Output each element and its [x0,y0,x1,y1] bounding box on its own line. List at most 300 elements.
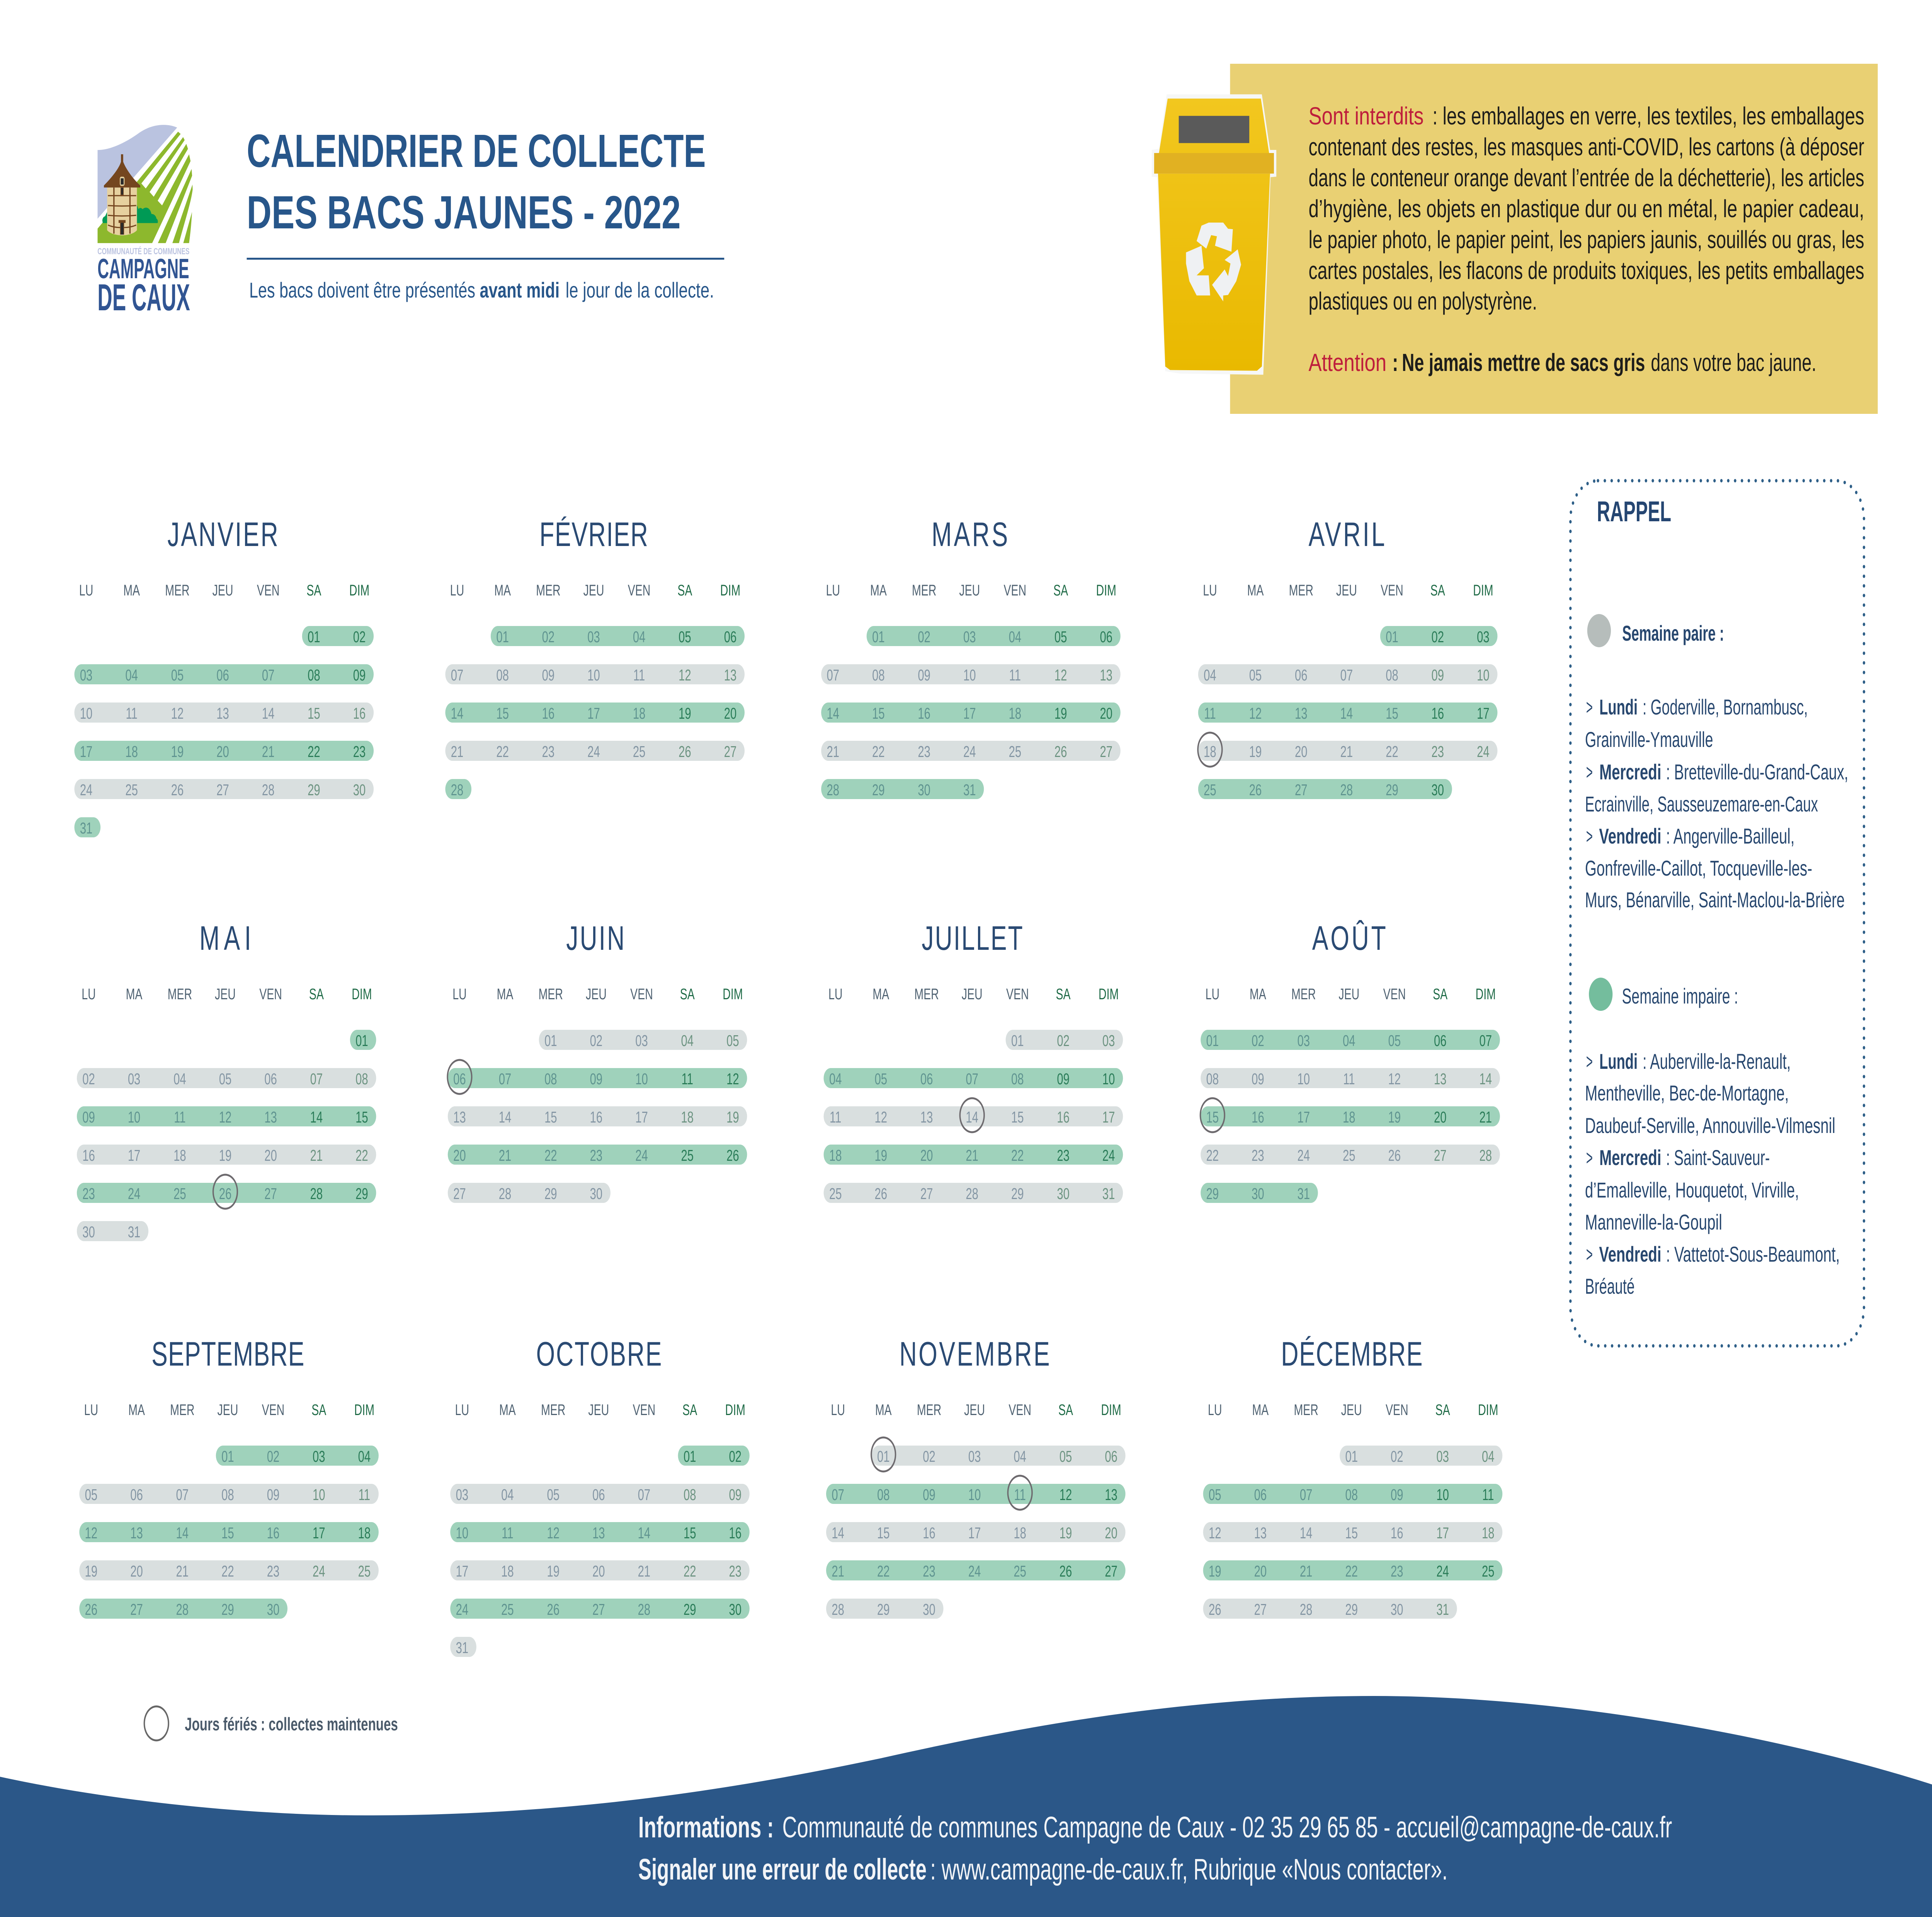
week row: 19 [1054,704,1067,722]
week row: 27 [1105,1562,1117,1580]
weekday labels: LU [826,582,840,599]
weekday labels: DIM [1473,582,1493,599]
month: novembre [826,1335,1126,1619]
communes semaine impaire: > [1586,1242,1593,1267]
weekday labels: LU [450,582,464,599]
weekday labels: MA [128,1402,145,1419]
week row: 27 [592,1601,605,1618]
week row [1201,1145,1500,1165]
heading: SEPTEMBRE [151,1335,304,1373]
week row [445,703,745,723]
legend: jours fériés [144,1706,398,1740]
month: octobre [450,1335,750,1657]
week row [445,741,745,761]
week row: 04 [1343,1032,1355,1050]
week row [77,1106,376,1126]
week row: 10 [1102,1070,1115,1088]
week row: 20 [1434,1108,1446,1126]
attention text [1309,349,1816,376]
week row: 01 [877,1448,889,1465]
week row: 01 [684,1448,696,1465]
week row: 17 [80,743,92,760]
week row: 14 [832,1524,844,1542]
week row: 15 [355,1108,368,1126]
week row: 03 [963,628,976,646]
week row: 23 [1057,1146,1070,1164]
weekday labels: MER [917,1402,941,1419]
week row: 22 [1386,743,1398,760]
week row [491,626,745,646]
weekday labels [450,582,740,599]
week row: 22 [1011,1146,1024,1164]
week row [1201,1106,1500,1126]
week row [826,1599,944,1619]
week row: 04 [1009,628,1021,646]
week row: 29 [544,1185,557,1203]
week row: 11 [682,1070,693,1088]
week row [867,626,1121,646]
subtitle [249,278,714,303]
week row: 14 [1480,1070,1492,1088]
week row: 01 [544,1032,557,1050]
forbidden items text: cartes postales, les flacons de produits toxiques, les petits emballages [1309,257,1864,284]
weekday labels: SA [1053,582,1068,599]
week row: 07 [832,1486,844,1504]
week row: 06 [1295,666,1308,684]
week row [74,741,374,761]
weekday labels: MA [875,1402,892,1419]
weekday labels: DIM [1099,986,1119,1003]
week row: 25 [125,781,138,799]
week row: 05 [1060,1448,1072,1465]
week row: 10 [313,1486,325,1504]
week row: 03 [635,1032,648,1050]
week row: 02 [590,1032,602,1050]
week row: 02 [353,628,366,646]
week row: 30 [1057,1185,1070,1203]
week row: 25 [1482,1562,1494,1580]
week row: 22 [684,1562,696,1580]
weekday labels [84,1402,374,1419]
week row: 06 [130,1486,143,1504]
weekday labels [1206,986,1496,1003]
logo text: CAMPAGNE [97,253,189,284]
week row: 11 [1343,1070,1355,1088]
week row: 15 [1345,1524,1358,1542]
week row: 28 [1340,781,1353,799]
week row: 05 [1054,628,1067,646]
week row: 12 [547,1524,560,1542]
weekday labels: MER [1291,986,1316,1003]
week row [1198,664,1497,684]
week row: 13 [1100,666,1112,684]
week row: 19 [171,743,184,760]
communes semaine paire: > [1586,760,1593,784]
week row: 09 [729,1486,742,1504]
legend dot: semaine impaire [1589,978,1612,1011]
forbidden items text: le papier photo, le papier peint, les papiers jaunis, souillés ou gras, les [1309,226,1864,253]
week row: 26 [547,1601,560,1618]
week row: 22 [308,743,320,760]
week row: 29 [355,1185,368,1203]
heading: rappel: RAPPEL [1597,495,1671,527]
week row [79,1560,379,1580]
week row: 25 [1343,1146,1355,1164]
week row: 26 [1249,781,1262,799]
week row: 09 [82,1108,95,1126]
week row: 14 [966,1108,978,1126]
week row: 31 [128,1223,140,1241]
week row [450,1637,476,1657]
holiday circle: 15 août [1200,1098,1225,1132]
weekday labels: JEU [215,986,236,1003]
week row: 10 [1477,666,1490,684]
week row [302,626,374,646]
weekday labels: SA [1430,582,1445,599]
week row: 12 [1388,1070,1401,1088]
week row: 17 [1436,1524,1449,1542]
week row: 03 [1102,1032,1115,1050]
week row: 28 [1480,1146,1492,1164]
week row: 27 [1254,1601,1267,1618]
week row [824,1145,1123,1165]
month: juin [447,920,747,1203]
attention text: Ne jamais mettre de sacs gris [1402,349,1645,376]
week row: 25 [633,743,645,760]
week row: 05 [547,1486,560,1504]
week row [74,779,374,799]
week row: 20 [453,1146,466,1164]
weekday labels: SA [682,1402,697,1419]
week row [1203,1484,1502,1504]
week row: 21 [262,743,274,760]
communes semaine impaire: : Saint-Sauveur- [1666,1146,1770,1170]
week row: 28 [832,1601,844,1618]
week row: 16 [1252,1108,1264,1126]
week row: 28 [499,1185,511,1203]
week row: 11 [1014,1486,1026,1504]
week row: 20 [920,1146,933,1164]
week row: 01 [1345,1448,1358,1465]
week row: 10 [456,1524,468,1542]
week row: 29 [221,1601,234,1618]
communes semaine impaire: Vendredi [1599,1242,1661,1267]
month: juillet [824,920,1123,1203]
communes semaine impaire: Bréauté [1585,1274,1634,1299]
week row: 26 [85,1601,97,1618]
week row: 30 [82,1223,95,1241]
weekday labels: VEN [257,582,279,599]
week row: 14 [499,1108,511,1126]
week row: 04 [125,666,138,684]
week row: 20 [1254,1562,1267,1580]
week row: 18 [1343,1108,1355,1126]
week row: 22 [877,1562,889,1580]
week row [824,1106,1123,1126]
weekday labels: SA [311,1402,327,1419]
week row: 30 [1252,1185,1264,1203]
communes semaine paire: > [1586,695,1593,720]
week row: 26 [726,1146,739,1164]
week row: 28 [827,781,839,799]
title: DES BACS JAUNES - 2022 [247,187,681,238]
weekday labels: VEN [262,1402,284,1419]
heading: JANVIER [167,516,278,554]
logo: Campagne de Caux [97,125,193,318]
week row: 26 [1209,1601,1221,1618]
heading: DÉCEMBRE [1281,1335,1423,1373]
week row: 17 [456,1562,468,1580]
week row: 30 [1432,781,1444,799]
week row: 22 [1206,1146,1219,1164]
week row: 23 [1391,1562,1403,1580]
week row: 14 [1300,1524,1312,1542]
weekday labels [455,1402,745,1419]
week row: 08 [684,1486,696,1504]
week row: 30 [590,1185,602,1203]
footer information text: : www.campagne-de-caux.fr, Rubrique «Nous contacter». [930,1853,1447,1886]
month: avril [1198,516,1497,799]
week row: 19 [1388,1108,1401,1126]
week row: 28 [638,1601,650,1618]
week row: 14 [310,1108,323,1126]
week row: 09 [542,666,554,684]
week row: 06 [1434,1032,1446,1050]
week row: 01 [496,628,509,646]
week row: 26 [1054,743,1067,760]
week row: 21 [310,1146,323,1164]
heading: JUILLET [922,920,1023,958]
week row: 02 [1057,1032,1070,1050]
week row: 06 [1100,628,1112,646]
week row [1201,1030,1500,1050]
holiday circle: 1 novembre [871,1437,896,1471]
week row: 24 [313,1562,325,1580]
week row: 12 [679,666,691,684]
week row: 02 [1391,1448,1403,1465]
week row: 09 [1391,1486,1403,1504]
weekday labels [1203,582,1493,599]
week row [450,1522,750,1542]
weekday labels: SA [680,986,695,1003]
week row: 12 [1060,1486,1072,1504]
weekday labels: VEN [1006,986,1029,1003]
week row: 07 [262,666,274,684]
week row: 18 [125,743,138,760]
week row: 08 [355,1070,368,1088]
week row: 06 [724,628,736,646]
week row: 02 [923,1448,935,1465]
weekday labels [831,1402,1121,1419]
logo text: COMMUNAUTÉ DE COMMUNES [97,246,189,257]
week row: 01 [308,628,320,646]
weekday labels: LU [828,986,842,1003]
week row: 19 [679,704,691,722]
week row: 17 [1297,1108,1310,1126]
week row: 07 [1300,1486,1312,1504]
week row: 15 [684,1524,696,1542]
week row: 16 [82,1146,95,1164]
week row: 09 [918,666,930,684]
month: mai [77,920,376,1241]
weekday labels: VEN [1383,986,1406,1003]
week row: 24 [635,1146,648,1164]
week row: 04 [501,1486,514,1504]
week row: 03 [128,1070,140,1088]
week row: 01 [1011,1032,1024,1050]
week row: 11 [1204,704,1216,722]
week row: 24 [587,743,600,760]
week row: 19 [875,1146,887,1164]
holiday circle: 18 avril [1198,733,1222,767]
week row: 07 [1480,1032,1492,1050]
week row: 24 [1436,1562,1449,1580]
weekday labels: DIM [349,582,369,599]
week row: 25 [829,1185,842,1203]
weekday labels: SA [677,582,692,599]
week row: 29 [1206,1185,1219,1203]
heading: MAI [199,920,251,958]
footer wave band [0,1696,1932,1917]
week row: 14 [176,1524,189,1542]
week row: 06 [1105,1448,1117,1465]
communes semaine impaire: Mercredi [1599,1146,1661,1170]
weekday labels: MA [870,582,887,599]
attention text: dans votre bac jaune. [1651,349,1816,376]
communes semaine impaire: : Auberville-la-Renault, [1643,1050,1791,1074]
week row: 24 [128,1185,140,1203]
week row: 07 [310,1070,323,1088]
week row: 15 [1386,704,1398,722]
weekday labels: LU [1208,1402,1222,1419]
week row: 01 [355,1032,368,1050]
weekday labels: VEN [1009,1402,1031,1419]
week row [216,1446,379,1466]
week row: 22 [872,743,885,760]
week row: 11 [174,1108,186,1126]
week row: 15 [877,1524,889,1542]
week row: 13 [130,1524,143,1542]
week row: 31 [1297,1185,1310,1203]
weekday labels: LU [82,986,96,1003]
week row: 26 [1388,1146,1401,1164]
weekday labels: MA [1250,986,1266,1003]
forbidden items text: plastiques ou en polystyrène. [1309,287,1537,315]
week row: 19 [85,1562,97,1580]
week row: 25 [173,1185,186,1203]
title [247,125,706,238]
week row: 19 [1060,1524,1072,1542]
week row: 27 [216,781,229,799]
week row [77,1183,376,1203]
week row: 23 [918,743,930,760]
weekday labels: DIM [352,986,372,1003]
week row: 12 [85,1524,97,1542]
week row: 01 [1206,1032,1219,1050]
communes semaine paire: : Bretteville-du-Grand-Caux, [1666,760,1848,784]
week row: 07 [499,1070,511,1088]
weekday labels: VEN [628,582,650,599]
week row: 21 [966,1146,978,1164]
holiday circle: 11 novembre [1008,1476,1032,1510]
weekday labels: JEU [213,582,233,599]
week row: 13 [216,704,229,722]
week row: 09 [590,1070,602,1088]
weekday labels: LU [455,1402,469,1419]
week row [1380,626,1497,646]
week row: 16 [267,1524,279,1542]
weekday labels: JEU [959,582,980,599]
weekday labels: MER [165,582,190,599]
week row: 21 [638,1562,650,1580]
week row: 20 [1105,1524,1117,1542]
weekday labels: VEN [630,986,653,1003]
week row: 20 [724,704,736,722]
week row [539,1030,747,1050]
weekday labels: MER [539,986,563,1003]
legend circle [144,1706,168,1740]
weekday labels: LU [1206,986,1219,1003]
weekday labels [826,582,1116,599]
week row: 20 [130,1562,143,1580]
week row: 27 [920,1185,933,1203]
week row: 27 [130,1601,143,1618]
week row: 20 [592,1562,605,1580]
weekday labels [452,986,743,1003]
week row: 04 [829,1070,842,1088]
week row: 19 [547,1562,560,1580]
heading: MARS [932,516,1008,554]
week row [1198,703,1497,723]
week row: 05 [1249,666,1262,684]
week row: 15 [1011,1108,1024,1126]
weekday labels [1208,1402,1498,1419]
week row: 30 [353,781,366,799]
week row [77,1068,376,1088]
week row: 18 [173,1146,186,1164]
week row: 11 [633,666,645,684]
week row: 16 [918,704,930,722]
week row: 15 [1206,1108,1219,1126]
communes semaine paire: Ecrainville, Sausseuzemare-en-Caux [1585,792,1818,816]
subtitle: Les bacs doivent être présentés [249,278,475,303]
week row: 12 [1209,1524,1221,1542]
weekday labels: MA [872,986,889,1003]
weekday labels: LU [452,986,467,1003]
weekday labels: DIM [354,1402,374,1419]
week row: 07 [827,666,839,684]
week row: 29 [877,1601,889,1618]
logo text [97,246,190,318]
week row: 17 [587,704,600,722]
week row: 10 [80,704,92,722]
week row: 13 [1254,1524,1267,1542]
week row [678,1446,750,1466]
week row [1006,1030,1123,1050]
week row: 07 [966,1070,978,1088]
week row [448,1183,611,1203]
week row: 16 [1432,704,1444,722]
footer information text: Communauté de communes Campagne de Caux - 02 35 29 65 85 - accueil@campagne-de-caux.fr [782,1811,1672,1844]
week row: 24 [80,781,92,799]
week row: 05 [171,666,184,684]
week row: 11 [1009,666,1021,684]
forbidden items text: d’hygiène, les objets en plastique dur ou en métal, le papier cadeau, [1309,195,1864,223]
week row: 30 [918,781,930,799]
week row: 07 [451,666,463,684]
week row [448,1068,747,1088]
weekday labels [82,986,372,1003]
